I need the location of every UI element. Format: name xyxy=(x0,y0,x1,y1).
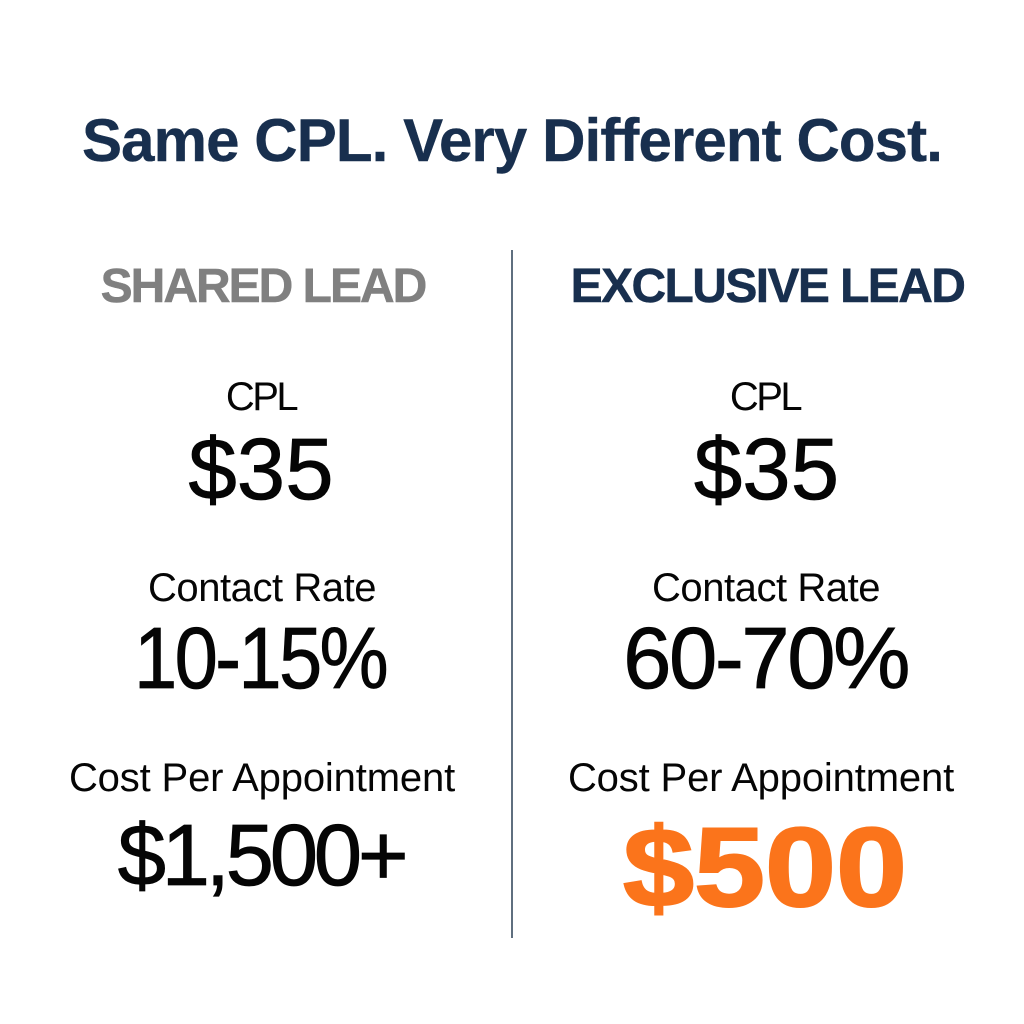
label: CPL: CPL xyxy=(730,375,800,419)
value: cost per appointment highlighted: $500 xyxy=(622,805,907,930)
value: cost per appointment: $1,500+ xyxy=(118,807,404,904)
heading: exclusive lead: EXCLUSIVE LEAD xyxy=(571,260,964,313)
title: Same CPL. Very Different Cost. xyxy=(82,107,942,174)
value: CPL: $35 xyxy=(694,421,839,518)
value: contact rate: 60-70% xyxy=(623,610,908,707)
value: CPL: $35 xyxy=(188,421,334,518)
label: cost per appointment: Cost Per Appointment xyxy=(69,756,455,800)
value: contact rate: 10-15% xyxy=(134,610,386,707)
label: contact rate: Contact Rate xyxy=(148,566,376,610)
divider between columns xyxy=(511,250,513,938)
label: cost per appointment: Cost Per Appointment xyxy=(568,756,954,800)
panel: shared lead xyxy=(69,260,455,904)
label: CPL: CPL xyxy=(226,375,296,419)
label: contact rate: Contact Rate xyxy=(652,566,880,610)
heading: shared lead: SHARED LEAD xyxy=(101,260,425,313)
panel: exclusive lead xyxy=(568,260,964,930)
